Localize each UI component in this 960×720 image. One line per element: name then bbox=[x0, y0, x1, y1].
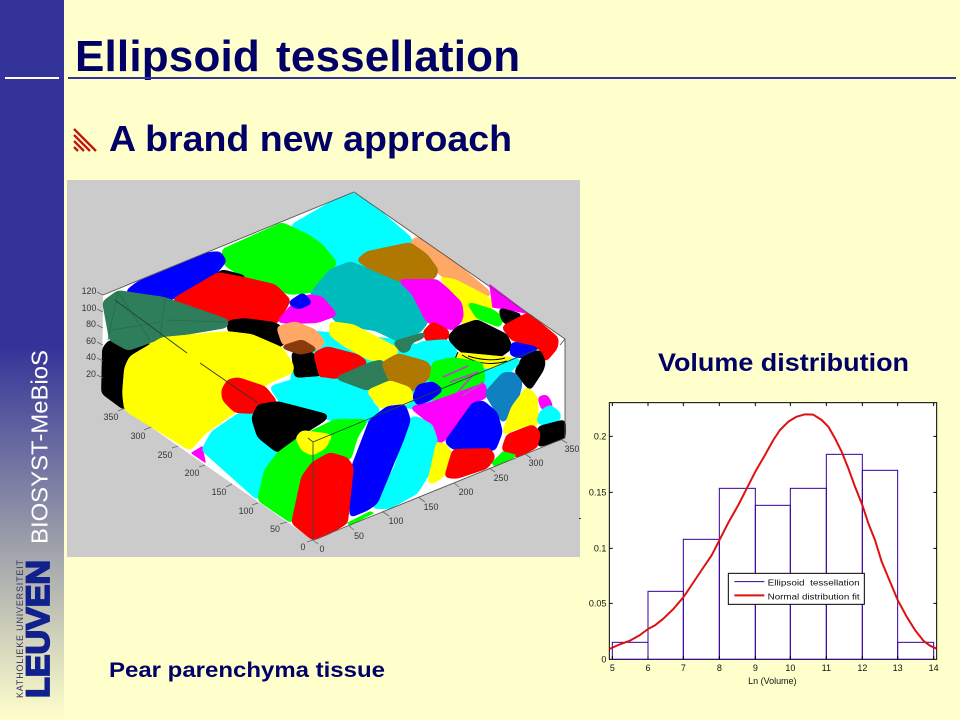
subheading: A brand new approach bbox=[109, 118, 512, 159]
axis labels: 40 bbox=[86, 352, 96, 362]
axis ticks bbox=[97, 292, 567, 544]
title: tessellation bbox=[276, 32, 520, 81]
facets on green cell bbox=[108, 292, 227, 340]
black hatch detail bbox=[455, 352, 507, 363]
plot box edges and axes bbox=[103, 192, 565, 540]
logo: KU Leuven: KATHOLIEKE UNIVERSITEIT bbox=[15, 560, 25, 698]
plot box base bbox=[102, 192, 565, 540]
x axis labels bbox=[610, 663, 939, 673]
y axis labels: 0.15 bbox=[589, 488, 606, 498]
x axis title: Ln (Volume) bbox=[748, 676, 797, 686]
panel: 3D ellipsoid tessellation plot bbox=[67, 180, 581, 557]
y axis labels: 0 bbox=[601, 655, 606, 665]
x axis labels: 7 bbox=[681, 663, 686, 673]
legend bbox=[728, 573, 864, 604]
axis labels: 80 bbox=[86, 319, 96, 329]
purple hatch detail bbox=[443, 366, 484, 396]
axis labels: 100 bbox=[239, 506, 253, 516]
axis ticks bbox=[609, 403, 937, 659]
axis labels: 20 bbox=[86, 369, 96, 379]
axis labels: 250 bbox=[158, 450, 172, 460]
x axis labels: 9 bbox=[753, 663, 758, 673]
axis labels: 50 bbox=[270, 524, 280, 534]
title: Ellipsoid bbox=[75, 32, 260, 81]
axis labels: 0 bbox=[320, 544, 325, 554]
axis labels: 100 bbox=[389, 516, 403, 526]
axis labels: 150 bbox=[212, 487, 226, 497]
y axis labels: 0.1 bbox=[594, 544, 606, 554]
y axis labels: 0.05 bbox=[589, 599, 606, 609]
axis labels: 50 bbox=[354, 531, 364, 541]
axis labels: 350 bbox=[104, 412, 118, 422]
caption: pear parenchyma tissue: Pear parenchyma tissue bbox=[109, 658, 385, 682]
axis labels: 200 bbox=[459, 487, 473, 497]
sidebar label: BIOSYST-MeBioS: BIOSYST-MeBioS bbox=[26, 350, 52, 544]
title underline bbox=[68, 77, 956, 79]
ellipsoid cells bbox=[102, 193, 565, 540]
axis labels bbox=[82, 286, 579, 554]
axis labels: 250 bbox=[494, 473, 508, 483]
y axis labels: 0.2 bbox=[594, 432, 606, 442]
logo: KU Leuven: LEUVEN bbox=[20, 560, 56, 698]
x axis labels: 12 bbox=[857, 663, 867, 673]
normal distribution curve bbox=[609, 414, 937, 649]
histogram bars bbox=[612, 454, 934, 659]
plot area bbox=[609, 403, 937, 659]
axis labels: 60 bbox=[86, 336, 96, 346]
x axis labels: 13 bbox=[893, 663, 903, 673]
axis labels: 350 bbox=[565, 444, 579, 454]
x axis labels: 8 bbox=[717, 663, 722, 673]
axis labels: 300 bbox=[529, 458, 543, 468]
axis labels: 0 bbox=[301, 542, 306, 552]
x axis labels: 6 bbox=[645, 663, 650, 673]
x axis labels: 5 bbox=[610, 663, 615, 673]
chart: volume histogram with normal fit bbox=[589, 403, 939, 686]
legend: Normal distribution fit bbox=[768, 591, 860, 601]
x axis labels: 14 bbox=[929, 663, 939, 673]
heading: volume distribution: Volume distribution bbox=[658, 349, 909, 377]
axis labels: 120 bbox=[82, 286, 96, 296]
sidebar bbox=[0, 0, 64, 720]
x axis labels: 11 bbox=[822, 663, 831, 673]
axis labels: 100 bbox=[82, 303, 96, 313]
axis labels: 200 bbox=[185, 468, 199, 478]
x axis labels: 10 bbox=[785, 663, 795, 673]
legend: Ellipsoid tessellation bbox=[768, 578, 860, 588]
icon: striped bullet bbox=[74, 129, 96, 151]
axis labels: 300 bbox=[131, 431, 145, 441]
axis labels: 150 bbox=[424, 502, 438, 512]
y axis labels bbox=[589, 432, 606, 665]
